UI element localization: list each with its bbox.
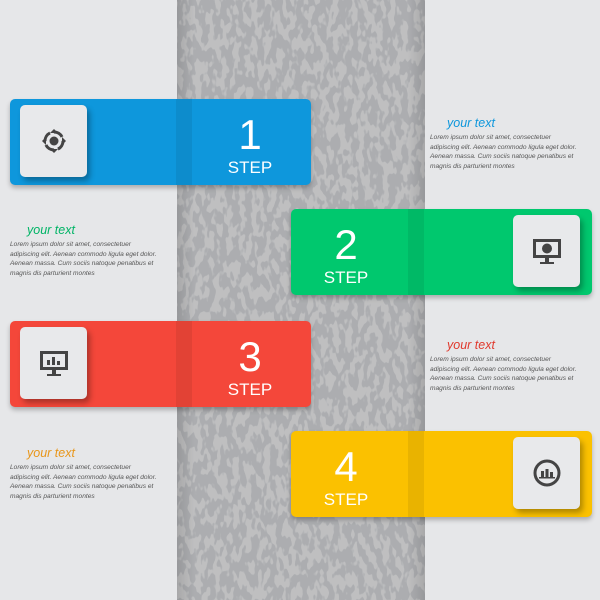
text block 3: Lorem ipsum dolor sit amet, consectetuer adipiscing elit. Aenean commodo ligula eget dolor. Aenean massa. Cum sociis natoque penatibus et magnis dis parturient montes	[430, 356, 576, 392]
icon: cycle	[20, 105, 87, 177]
step 1 bar	[10, 99, 311, 185]
icon: monitor chart	[20, 327, 87, 399]
icon: chart circle	[513, 437, 580, 509]
number 2: 2	[334, 221, 358, 268]
text block 3	[430, 338, 576, 392]
text block 1	[430, 116, 576, 170]
step label: STEP	[324, 268, 368, 287]
text block 3: your text	[447, 338, 495, 352]
step 3 bar	[10, 321, 311, 407]
icon: monitor pie	[513, 215, 580, 287]
step 2 bar	[291, 209, 592, 295]
text block 4: your text	[27, 446, 75, 460]
step 4 bar	[291, 431, 592, 517]
text block 1: Lorem ipsum dolor sit amet, consectetuer adipiscing elit. Aenean commodo ligula eget dolor. Aenean massa. Cum sociis natoque penatibus et magnis dis parturient montes	[430, 134, 576, 170]
text block 4: Lorem ipsum dolor sit amet, consectetuer adipiscing elit. Aenean commodo ligula eget dolor. Aenean massa. Cum sociis natoque penatibus et magnis dis parturient montes	[10, 464, 156, 500]
step label: STEP	[228, 380, 272, 399]
step label: STEP	[228, 158, 272, 177]
textured column	[177, 0, 425, 600]
text block 2: Lorem ipsum dolor sit amet, consectetuer adipiscing elit. Aenean commodo ligula eget dolor. Aenean massa. Cum sociis natoque penatibus et magnis dis parturient montes	[10, 241, 156, 276]
text block 1: your text	[447, 116, 495, 130]
number 4: 4	[334, 443, 358, 490]
text block 4	[10, 446, 156, 500]
step label: STEP	[324, 490, 368, 509]
number 1: 1	[238, 111, 262, 158]
number 3: 3	[238, 333, 262, 380]
text block 2	[10, 223, 156, 276]
text block 2: your text	[27, 223, 75, 237]
